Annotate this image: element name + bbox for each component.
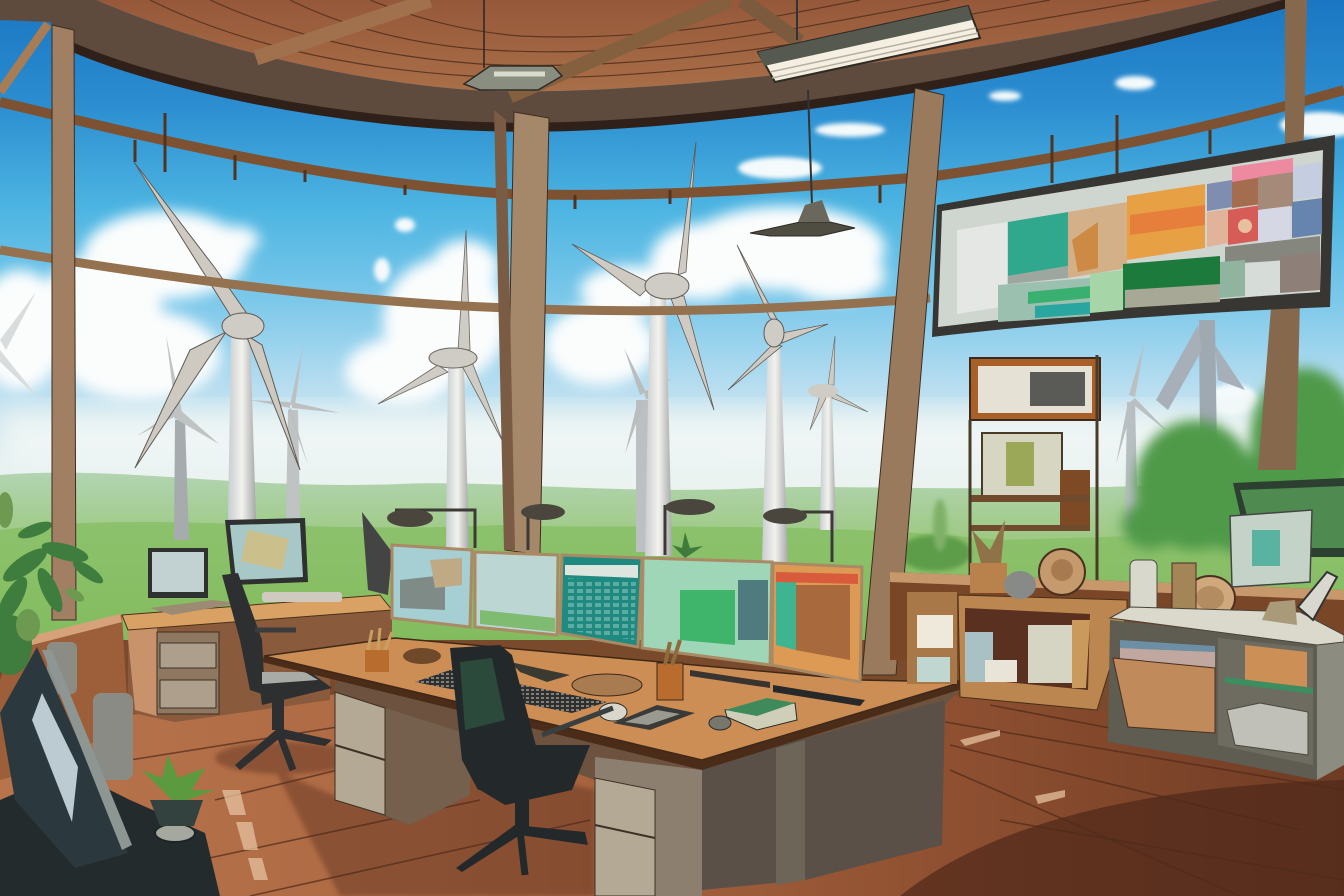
floor planks [130, 705, 1344, 896]
wind turbine: center main [572, 142, 714, 556]
center office chair [450, 645, 613, 875]
wind turbine: far right small [1116, 340, 1168, 525]
wind turbine: far left edge [0, 292, 40, 400]
ceiling fixture: round lamp [464, 0, 562, 90]
right side table [1108, 607, 1344, 780]
monitor screen tiles [938, 150, 1323, 327]
shelf decor [970, 520, 1235, 620]
wind turbine: left large [134, 162, 300, 520]
small mouse [709, 716, 731, 730]
desk items [365, 628, 865, 730]
wind turbine: far right large [1156, 320, 1245, 450]
ceiling planks [150, 0, 1150, 78]
office chair left [222, 573, 332, 770]
mouse [599, 703, 627, 721]
desk lamps [387, 499, 832, 562]
clouds [0, 206, 885, 406]
wall monitor [932, 135, 1335, 337]
wind turbine: center back [624, 348, 672, 552]
window frames: rails [0, 90, 1344, 311]
floor shadows [215, 740, 595, 896]
keyboards [415, 670, 607, 713]
wind turbine: left behind [250, 345, 340, 518]
main desk monitor bank [392, 545, 862, 682]
floor [0, 690, 1344, 896]
right shelves and books [907, 592, 1127, 710]
monitor feet [773, 685, 865, 706]
pen cups [365, 650, 389, 672]
wind turbine: center left [378, 230, 503, 548]
wind turbine: center right [728, 245, 828, 562]
back wall lower [0, 572, 1344, 780]
tablet [613, 705, 695, 730]
floor light patches [222, 730, 1065, 880]
ceiling [0, 0, 1300, 128]
small clouds [374, 76, 1344, 459]
wooden tray [572, 674, 642, 696]
wind turbine: small right of center [808, 336, 868, 530]
trees right [1122, 368, 1344, 555]
hooks on rail [135, 110, 1296, 209]
plant left [0, 492, 106, 675]
hills [0, 473, 1344, 640]
foreground left workstation [0, 642, 220, 896]
book [725, 703, 797, 730]
sky [0, 0, 1344, 600]
ceiling ring beam [0, 0, 1300, 128]
left side desk [122, 595, 392, 722]
horizon haze [0, 410, 1344, 475]
wind turbine: left small [137, 335, 219, 540]
main desk [262, 638, 965, 896]
window posts [52, 0, 1307, 675]
small plant behind monitors [672, 532, 703, 558]
bushes mid right [899, 499, 971, 571]
left desk monitors [148, 512, 392, 615]
hanging ceiling fan [750, 90, 855, 236]
wall shelf with charts [970, 355, 1100, 590]
right desk monitors [1230, 478, 1344, 625]
desk snack [403, 648, 441, 664]
ceiling fixture: strip light [758, 0, 980, 82]
monitor content tiles [400, 575, 445, 610]
potted plant [142, 755, 214, 826]
